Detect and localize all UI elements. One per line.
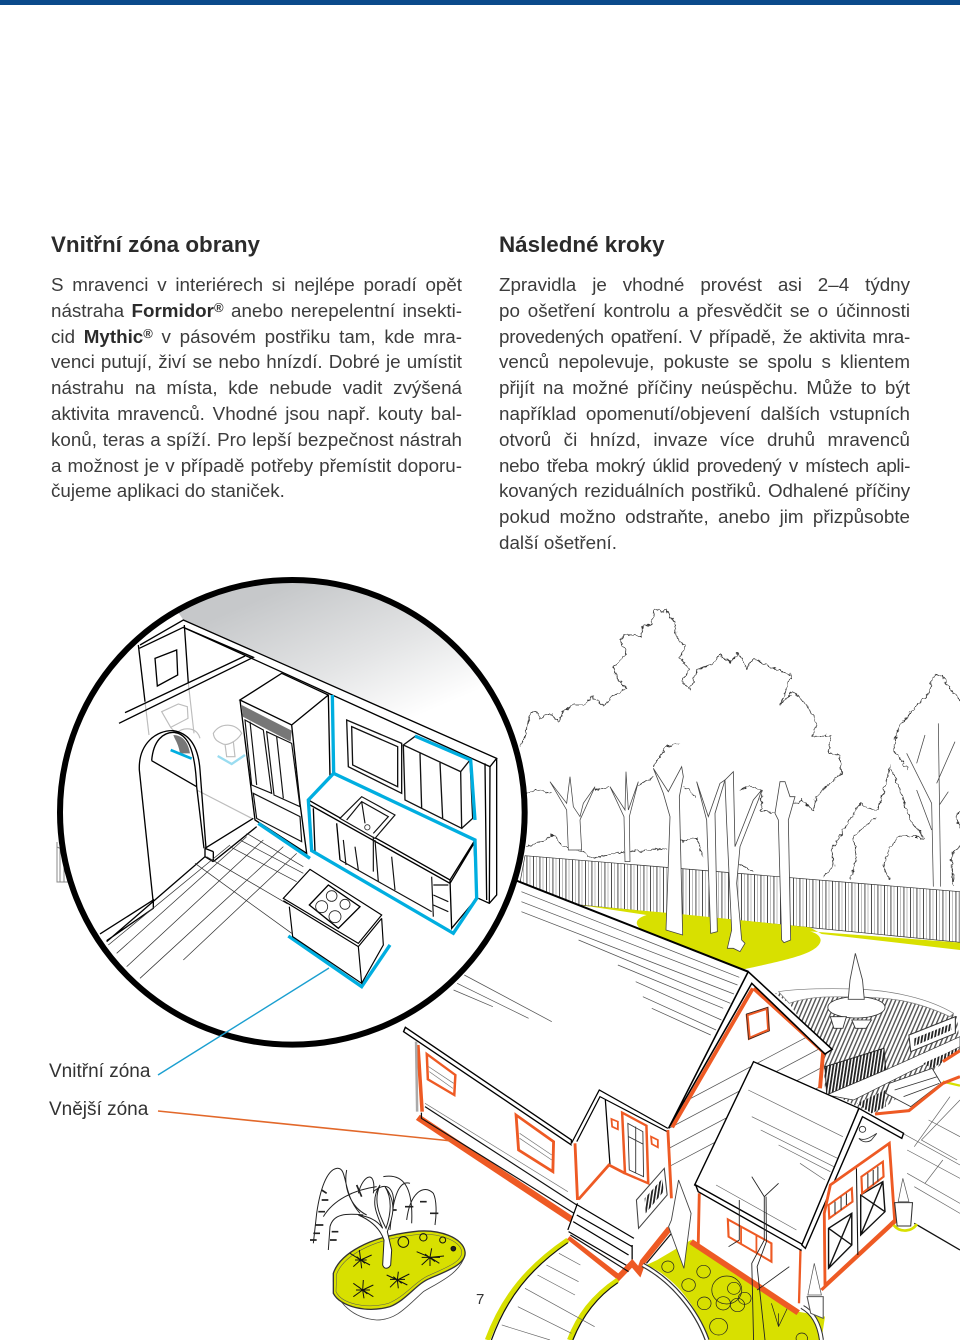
thin foreground tree bbox=[729, 1177, 789, 1340]
upper cabinets bbox=[403, 736, 473, 828]
text block: interior zone: konů, teras a spíží. Pro lepší bezpečnost nástrah bbox=[51, 429, 462, 450]
text block: next steps: provedených opatření. V případě, že aktivita mra- bbox=[499, 326, 910, 347]
window bbox=[347, 720, 402, 793]
text block: next steps: venců nepolevuje, pokuste se spolu s klientem bbox=[499, 351, 910, 372]
deck bbox=[775, 953, 960, 1114]
top bar bbox=[0, 0, 960, 5]
leader line: interior zone bbox=[158, 968, 329, 1075]
text block: interior zone: venci putují, živí se nebo hnízdí. Dobré je umístit bbox=[51, 351, 462, 372]
text block: next steps: kovaných reziduálních postřiků. Odhalené příčiny bbox=[499, 480, 910, 501]
text block: next steps: například opomenutí/objevení dalších vstupních bbox=[499, 403, 910, 424]
tree canopies bbox=[520, 608, 960, 887]
middle window bbox=[516, 1115, 554, 1172]
text block: next steps: další ošetření. bbox=[499, 532, 617, 553]
house bbox=[404, 877, 960, 1340]
text block: interior zone: nástraha Formidor® anebo nerepelentní insekti- bbox=[51, 300, 462, 321]
text block: interior zone: S mravenci v interiérech si nejlépe poradí opět bbox=[51, 274, 462, 295]
foreground trunks bbox=[653, 767, 795, 952]
text block: next steps: Zpravidla je vhodné provést asi 2–4 týdny bbox=[499, 274, 910, 295]
ceiling edge bbox=[119, 620, 497, 903]
illustration: house, garden and kitchen cutaway bbox=[56, 577, 960, 1340]
heading: Vnitřní zóna obrany: Vnitřní zóna obrany bbox=[51, 232, 260, 257]
kitchen island bbox=[283, 869, 383, 983]
label: exterior zone: Vnější zóna bbox=[49, 1099, 148, 1120]
ghost bathroom bbox=[145, 683, 252, 818]
door bbox=[622, 1113, 648, 1183]
fence bbox=[520, 856, 960, 942]
eaves bbox=[404, 1027, 571, 1145]
ceiling shading bbox=[178, 583, 472, 706]
lower cabinets and counter bbox=[310, 796, 474, 930]
text block: next steps: po ošetření kontrolu a přesvědčit se o účinnosti bbox=[499, 300, 910, 321]
garage bbox=[691, 1062, 904, 1313]
label: interior zone: Vnitřní zóna bbox=[49, 1061, 150, 1082]
text block: interior zone: a možnost je v případě potřeby přemístit doporu- bbox=[51, 455, 462, 476]
text block: interior zone: aktivita mravenců. Vhodné jsou např. kouty bal- bbox=[51, 403, 462, 424]
kitchen cutaway circle bbox=[60, 570, 550, 1045]
cooktop bbox=[309, 885, 360, 928]
willow branches bbox=[310, 1168, 438, 1250]
garage gable wall bbox=[800, 1117, 895, 1308]
planter pots bbox=[895, 1203, 912, 1226]
garden island with willow bbox=[310, 1168, 465, 1320]
flower bed with shrubs bbox=[643, 1240, 825, 1340]
main gable bbox=[669, 983, 825, 1180]
patio bbox=[879, 1082, 960, 1250]
sink bbox=[340, 797, 395, 872]
front wall bbox=[416, 1043, 577, 1207]
fridge bbox=[240, 673, 330, 853]
floor tiles bbox=[108, 833, 303, 978]
arch bbox=[100, 731, 257, 942]
deck railings bbox=[825, 1048, 886, 1095]
text block: interior zone: čujeme aplikaci do staniček. bbox=[51, 480, 285, 501]
text block: next steps: nebo třeba mokrý úklid provedený v místech apli- bbox=[499, 455, 910, 476]
flower bed bbox=[333, 1231, 465, 1309]
text block: next steps: přijít na možné příčiny neúspěchu. Může to být bbox=[499, 377, 910, 398]
back trees bbox=[550, 723, 955, 887]
patio table and umbrella bbox=[828, 997, 885, 1018]
text block: next steps: pokud možno odstraňte, anebo jim přizpůsobte bbox=[499, 506, 910, 527]
cypress shrub bbox=[669, 1180, 691, 1268]
lawn behind house bbox=[580, 905, 960, 969]
gable window bbox=[747, 1008, 769, 1038]
left window bbox=[427, 1054, 455, 1095]
trees and fence bbox=[520, 608, 960, 969]
leader line: exterior zone bbox=[158, 1111, 452, 1141]
blue treatment lines bbox=[258, 695, 477, 987]
barn lamp bbox=[859, 1133, 877, 1142]
walkway bbox=[487, 1240, 618, 1340]
willow trunk bbox=[358, 1185, 393, 1268]
text block: next steps: otvorů či hnízd, invaze více druhů mravenců bbox=[499, 429, 910, 450]
entrance bbox=[568, 1090, 671, 1277]
garage window bbox=[728, 1219, 771, 1262]
text block: interior zone: nástrahu na místa, kde nebude vadit zvýšená bbox=[51, 377, 462, 398]
plants bbox=[350, 1234, 456, 1298]
text block: next steps bbox=[499, 274, 910, 553]
text block: interior zone bbox=[51, 274, 462, 501]
text block: interior zone: cid Mythic® v pásovém postřiku tam, kde mra- bbox=[51, 326, 462, 347]
circle outline bbox=[60, 580, 525, 1045]
garage side wall bbox=[693, 1192, 802, 1310]
page number: 7 bbox=[476, 1291, 484, 1308]
deck steps bbox=[886, 1068, 941, 1107]
porch railing bbox=[636, 1168, 667, 1228]
heading: Následné kroky: Následné kroky bbox=[499, 232, 665, 257]
barn doors bbox=[824, 1143, 895, 1285]
main roof bbox=[404, 877, 748, 1143]
steps bbox=[568, 1203, 643, 1267]
left fence fragment bbox=[57, 842, 68, 882]
